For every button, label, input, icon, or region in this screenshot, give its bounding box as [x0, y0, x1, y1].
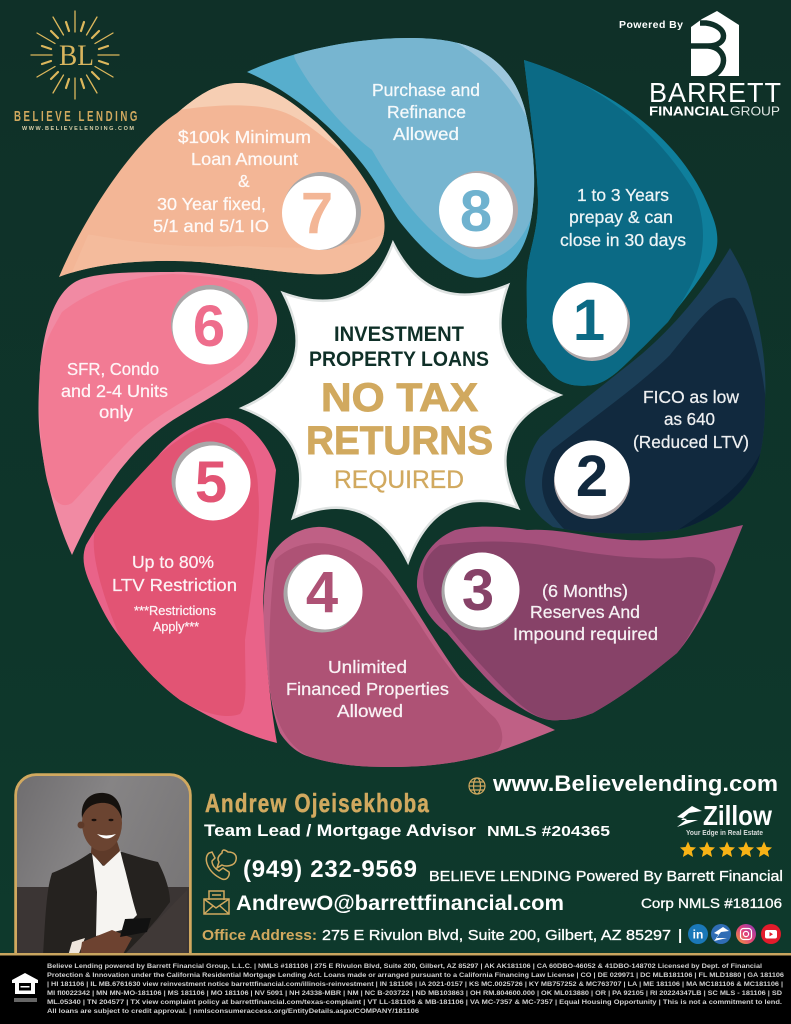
panel: petal 7 loan amount: [59, 83, 385, 277]
portrait: [17, 776, 189, 953]
text 4: [286, 657, 449, 721]
text 3: (6 Months): [542, 581, 628, 601]
text 8: Allowed: [393, 124, 459, 144]
center heading: INVESTMENT: [334, 323, 464, 346]
legal text: ML.05340 | TN 204577 | TX view complaint policy at barrettfinancial.com/texas-complaint | VT LL-181106 & MB-181106 | VA MC-7357 & MC-7357 | Equal Housing Opportunity | This is not a commitment to lend.: [47, 999, 782, 1006]
badge 6: [171, 285, 249, 364]
badge 8: 8: [460, 179, 492, 244]
text 6: only: [99, 402, 133, 422]
text 5: LTV Restriction: [112, 575, 237, 595]
text 5: Up to 80%: [132, 552, 214, 572]
icon: house B: [688, 11, 739, 79]
text 3: [513, 581, 658, 644]
text 3: Reserves And: [530, 602, 640, 622]
badge 8: [439, 171, 518, 249]
center heading: PROPERTY LOANS: [309, 348, 489, 371]
badge 4: 4: [306, 560, 338, 625]
contact: office label: Office Address:: [202, 927, 317, 944]
text 4: Unlimited: [328, 657, 407, 677]
text 7: &: [238, 171, 250, 191]
contact: phone: (949) 232-9569: [243, 856, 417, 883]
text 8: Refinance: [387, 102, 466, 122]
corp NMLS: Corp NMLS #181106: [641, 895, 782, 911]
contact: office address: 275 E Rivulon Blvd, Suite 200, Gilbert, AZ 85297: [322, 927, 671, 944]
panel: petal 1 prepay: [524, 60, 717, 386]
group wordmark: GROUP: [730, 104, 780, 118]
text 7: 30 Year fixed,: [157, 194, 266, 214]
portrait frame: [14, 773, 192, 953]
panel: petal 3 reserves: [417, 525, 743, 720]
icon: zillow mark: [677, 806, 702, 827]
text 1: 1 to 3 Years: [577, 185, 669, 205]
zillow badge: [677, 800, 772, 857]
center headline: RETURNS: [306, 419, 493, 463]
badge 7: 7: [301, 181, 333, 246]
text 6: and 2-4 Units: [61, 381, 168, 401]
text 8: Purchase and: [372, 80, 480, 100]
legal text: | HI 181106 | IL MB.6761630 view reinvestment notice barrettfinancial.com/illinois-reinvestment | IN 181106 | IA 2021-0157 | KS MC.0025726 | KY MB757252 & MC763707 | LA | ME 181106 | MA MC181106 & MC181106 |: [47, 981, 783, 988]
contact: name: Andrew Ojeisekhoba: [205, 788, 430, 818]
text 4: Financed Properties: [286, 679, 449, 699]
text 2: (Reduced LTV): [633, 432, 749, 452]
logo: Barrett Financial Group: [619, 11, 782, 118]
zillow tagline: Your Edge in Real Estate: [686, 828, 763, 837]
panel: petal 5 LTV: [84, 418, 277, 743]
logo: Believe Lending: [14, 11, 140, 132]
text 1: prepay & can: [569, 207, 673, 227]
text 5: [112, 552, 237, 634]
icon: equal housing: [12, 973, 38, 1002]
panel: petal 2 FICO: [525, 248, 775, 540]
center headline: [306, 376, 493, 463]
logo monogram: BL: [59, 39, 94, 72]
logo url: WWW.BELIEVELENDING.COM: [22, 126, 134, 132]
badge 3: 3: [462, 558, 494, 623]
text 4: Allowed: [337, 701, 403, 721]
icon: zillow: [711, 924, 731, 944]
text 2: FICO as low: [643, 387, 739, 407]
text 5: Apply***: [153, 620, 199, 634]
text 6: SFR, Condo: [67, 359, 159, 379]
contact: title: Team Lead / Mortgage Advisor: [204, 821, 476, 840]
text 5: ***Restrictions: [134, 604, 216, 618]
text 7: 5/1 and 5/1 IO: [153, 216, 269, 236]
badge 5: [172, 442, 250, 520]
center heading: [309, 323, 489, 371]
five stars: [680, 842, 772, 857]
legal text: Believe Lending powered by Barrett Financial Group, L.L.C. | NMLS #181106 | 275 E Rivulon Blvd, Suite 200, Gilbert, AZ 85297 | AK AK181106 | CA 60DBO-46052 & 41DBO-148702 Licensed by Dept. of Financial: [47, 963, 762, 970]
icon: phone with chat bubble: [206, 850, 236, 879]
contact: website: www.Believelending.com: [492, 771, 778, 796]
powered by label: Powered By: [619, 19, 683, 31]
badge 7: [282, 172, 361, 250]
social icons: [688, 924, 781, 944]
legal text: Protection & Innovation under the California Residential Mortgage Lending Act. Loans made or arranged pursuant to a California Financing Law License | CO | DE 029971 | DC MLB181106 | FL MLD1880 | GA 181106: [47, 972, 784, 979]
icon: youtube: [761, 924, 781, 944]
badge 5: 5: [195, 450, 227, 515]
icon: instagram: [736, 924, 756, 944]
badge 1: 1: [573, 288, 605, 353]
text 8: [372, 80, 480, 144]
text 7: [153, 127, 311, 236]
logo wordmark: BELIEVE LENDING: [14, 108, 140, 125]
financial group wordmark: FINANCIAL: [649, 104, 729, 118]
text 1: close in 30 days: [560, 230, 686, 250]
text 2: [633, 387, 749, 452]
panel: petal 4 financed properties: [263, 527, 555, 767]
icon: globe: [469, 778, 485, 794]
center headline: NO TAX: [321, 376, 478, 420]
center subheading: REQUIRED: [334, 466, 464, 494]
legal text: All loans are subject to credit approval. | nmlsconsumeraccess.org/EntityDetails.aspx/COMPANY/181106: [47, 1008, 419, 1015]
zillow wordmark: Zillow: [703, 800, 772, 831]
legal text: MI fl0022342 | MN MN-MO-181106 | MS 181106 | MO 181106 | NV 5091 | NH 24338-MBR | NM | NC B-203722 | ND MB103863 | OH RM.804600.000 | OK ML013880 | OR | PA 92105 | RI 20224347LB | SC MLS - 181106 | SD: [47, 990, 782, 997]
icon: linkedin: in: [693, 928, 703, 942]
barrett wordmark: BARRETT: [649, 77, 782, 108]
text 2: as 640: [664, 409, 715, 429]
icon: sunburst: [31, 11, 119, 99]
badge 2: 2: [576, 444, 608, 509]
text 3: Impound required: [513, 624, 658, 644]
badge 1: [552, 282, 630, 361]
company line: BELIEVE LENDING Powered By Barrett Financial: [429, 868, 783, 885]
text 1: [560, 185, 686, 250]
panel: petal 8 purchase and refinance: [247, 30, 540, 278]
text 7: $100k Minimum: [178, 127, 311, 147]
separator: |: [678, 927, 682, 944]
badge 3: [442, 552, 520, 630]
footer: [0, 953, 791, 1024]
contact: email: AndrewO@barrettfinancial.com: [236, 892, 564, 915]
badge 4: [284, 554, 362, 632]
icon: envelope: [204, 891, 229, 914]
legal text: [47, 963, 784, 1015]
text 7: Loan Amount: [191, 149, 298, 169]
panel: center starburst: [242, 243, 560, 562]
panel: petal 6 property types: [38, 272, 277, 555]
text 6: [61, 359, 168, 422]
contact: NMLS: NMLS #204365: [487, 823, 610, 840]
badge 6: 6: [193, 294, 225, 359]
badge 2: [554, 440, 630, 519]
